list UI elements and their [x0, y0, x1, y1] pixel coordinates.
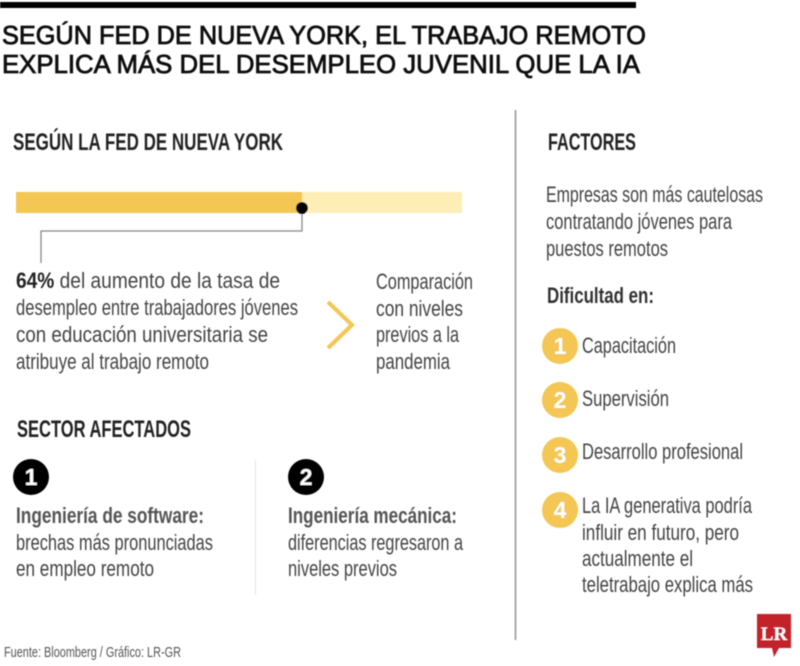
- sector 2 text: diferencias regresaron a: [288, 530, 464, 555]
- heading: según la Fed: SEGÚN LA FED DE NUEVA YORK: [13, 128, 283, 156]
- item 4: [542, 492, 753, 597]
- text: empresas: contratando jóvenes para: [546, 209, 733, 234]
- icon: number 2: [288, 459, 324, 495]
- subheading: dificultad: Dificultad en:: [547, 283, 654, 308]
- title: EXPLICA MÁS DEL DESEMPLEO JUVENIL QUE LA IA: [2, 49, 641, 79]
- source: Fuente: Bloomberg / Gráfico: LR-GR: [4, 644, 181, 661]
- item 4: influir en futuro, pero: [582, 520, 739, 545]
- text: comparison: pandemia: [376, 349, 451, 374]
- item 1: Capacitación: [582, 333, 676, 358]
- sector 1 text: [16, 503, 213, 581]
- text: 64% statement: atribuye al trabajo remoto: [16, 349, 209, 374]
- item 2: [542, 382, 669, 418]
- text: 64% statement: desempleo entre trabajadores jóvenes: [16, 295, 298, 320]
- text: empresas: [546, 182, 763, 261]
- item 1: 1: [554, 333, 567, 359]
- text: empresas: puestos remotos: [546, 236, 668, 261]
- sector 1: [13, 459, 213, 581]
- heading: sector afectados: SECTOR AFECTADOS: [17, 416, 191, 443]
- sector 2: [288, 459, 464, 581]
- text: 64% statement: 64% del aumento de la tasa de: [16, 268, 280, 293]
- title: SEGÚN FED DE NUEVA YORK, EL TRABAJO REMOTO: [2, 20, 646, 50]
- sector 2 text: niveles previos: [288, 556, 397, 581]
- logo: LR: LR: [761, 624, 787, 645]
- icon: chevron arrow: [328, 302, 352, 348]
- sector 1 text: en empleo remoto: [16, 556, 154, 581]
- text: 64% statement: [16, 268, 298, 374]
- title: [2, 20, 646, 79]
- item 3: 3: [554, 442, 566, 468]
- heading: factores: FACTORES: [548, 129, 636, 156]
- text: 64% statement: con educación universitaria se: [16, 322, 268, 347]
- item 4: actualmente el: [582, 546, 693, 571]
- text: comparison: [376, 269, 473, 374]
- icon: number 2: 2: [300, 464, 312, 490]
- sector 1 text: brechas más pronunciadas: [16, 530, 213, 555]
- progress bar 64%: [16, 192, 462, 263]
- logo: LR: [757, 614, 791, 657]
- text: comparison: previos a la: [376, 322, 460, 347]
- text: comparison: Comparación: [376, 269, 473, 294]
- sector 2 text: Ingeniería mecánica:: [288, 503, 457, 528]
- item 3: [542, 437, 743, 473]
- item 1: [542, 328, 676, 364]
- icon: number 1: [13, 459, 49, 495]
- top rule: [0, 2, 636, 8]
- text: comparison: con niveles: [376, 296, 463, 321]
- item 2: Supervisión: [582, 386, 669, 411]
- item 4: 4: [554, 497, 567, 523]
- icon: number 1: 1: [25, 464, 38, 490]
- sector 2 text: [288, 503, 464, 581]
- item 2: 2: [554, 387, 566, 413]
- sector 1 text: Ingeniería de software:: [16, 503, 204, 528]
- item 3: Desarrollo profesional: [582, 439, 743, 464]
